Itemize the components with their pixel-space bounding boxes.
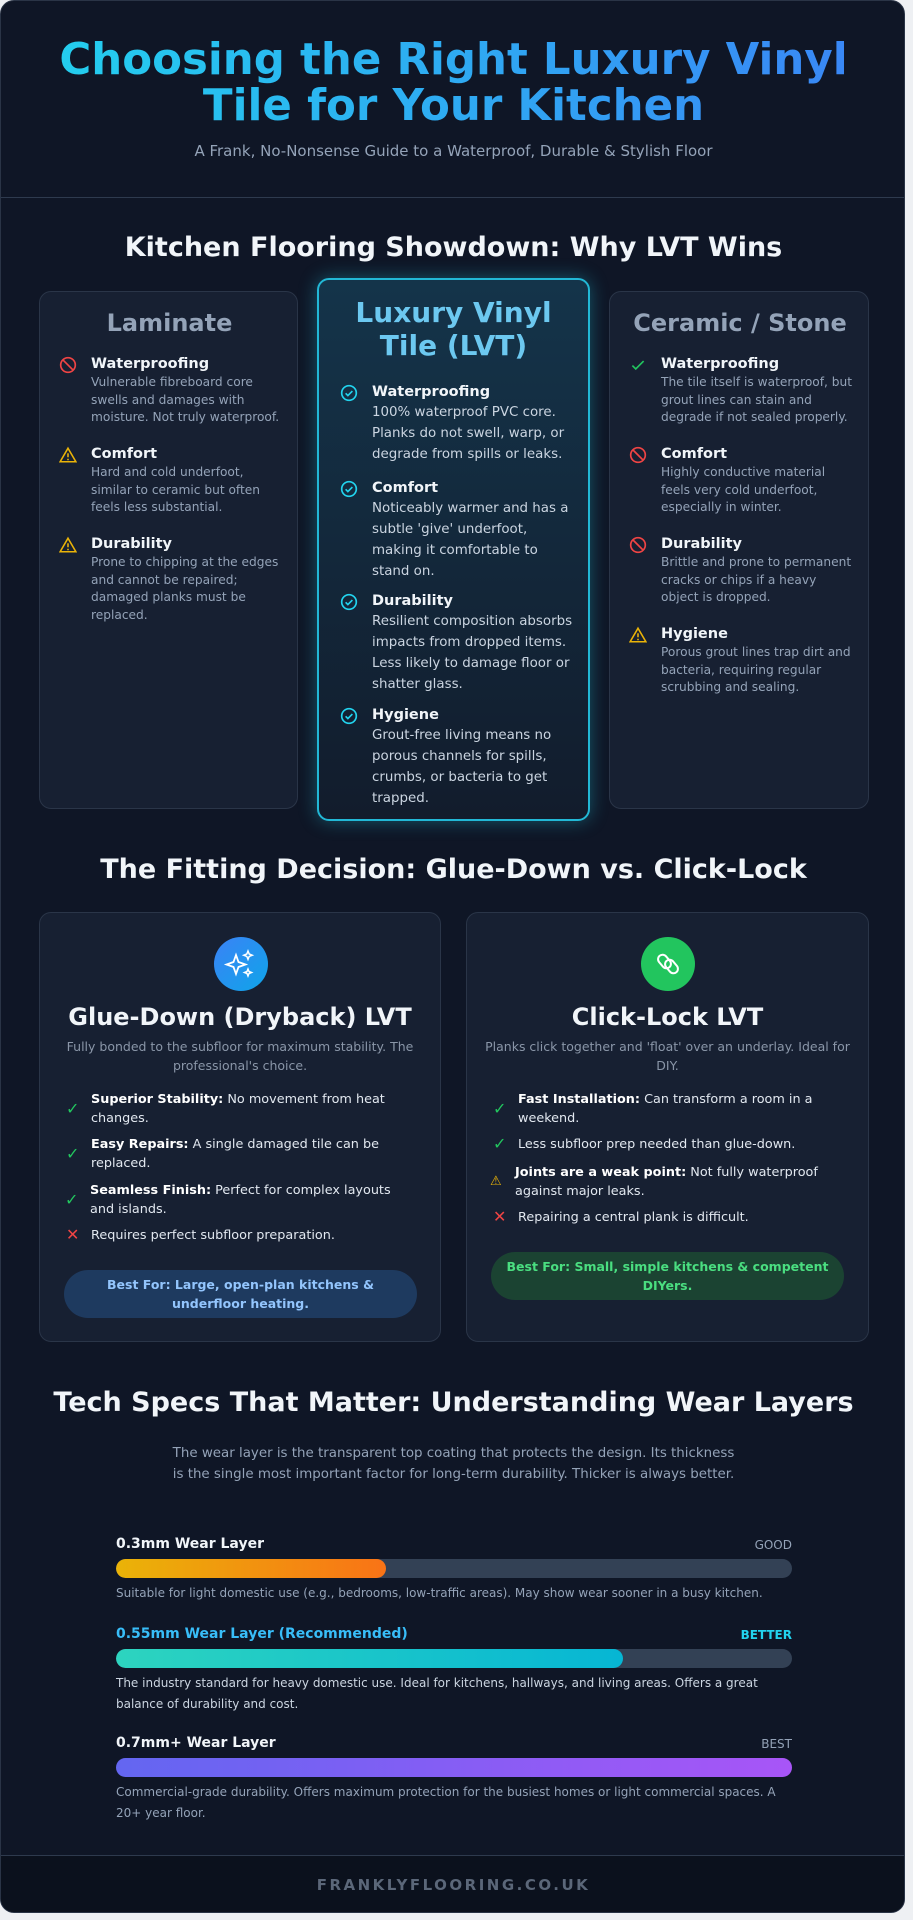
footer: FRANKLYFLOORING.CO.UK <box>317 1876 590 1894</box>
item: comfort: Comfort <box>91 446 157 462</box>
best for pill <box>64 1270 417 1318</box>
item: waterproofing: Waterproofing <box>372 384 490 400</box>
item: durability: Durability <box>661 536 742 552</box>
panel: LVT <box>317 278 590 821</box>
bar: 0.55mm <box>116 1626 792 1711</box>
intro text: The wear layer is the transparent top coating that protects the design. Its thickness <box>173 1446 734 1461</box>
click list: Less subfloor prep needed than glue-down. <box>518 1137 795 1152</box>
bar: 0.3mm: 0.3mm Wear Layer <box>116 1536 264 1552</box>
panel: glue-down <box>39 912 441 1342</box>
header <box>1 1 906 198</box>
heading: wear layers: Tech Specs That Matter: Understanding Wear Layers <box>53 1387 854 1418</box>
panel: click-lock: ⚠ <box>490 1174 502 1189</box>
item: durability: Durability <box>91 536 172 552</box>
item: comfort: Highly conductive material feels very cold underfoot, especially in winter. <box>661 465 825 514</box>
click list: Joints are a weak point: Not fully waterproof against major leaks. <box>515 1165 818 1199</box>
glue list <box>65 1092 391 1244</box>
bar: 0.7mm: 0.7mm+ Wear Layer <box>116 1735 276 1751</box>
bar: 0.7mm: Commercial-grade durability. Offers maximum protection for the busiest homes or light commercial spaces. A 20+ year floor. <box>116 1785 776 1820</box>
title: Choosing the Right Luxury Vinyl <box>59 35 848 85</box>
panel: ceramic <box>609 291 869 809</box>
LVT title <box>355 296 552 362</box>
item: comfort <box>59 446 260 514</box>
item: durability: Brittle and prone to permanent cracks or chips if a heavy object is dropped. <box>661 555 851 604</box>
item: hygiene: Grout-free living means no porous channels for spills, crumbs, or bacteria to get trapped. <box>372 728 551 806</box>
click list: Fast Installation: Can transform a room in a weekend. <box>518 1092 812 1126</box>
item: waterproofing <box>632 356 852 424</box>
item: comfort: Noticeably warmer and has a <box>372 501 568 516</box>
panel: click-lock <box>466 912 869 1342</box>
item: durability: Resilient composition absorbs impacts from dropped items. Less likely to damage floor or shatter glass. <box>372 614 572 692</box>
footer <box>1 1855 906 1915</box>
LVT title: Tile (LVT) <box>380 329 527 362</box>
item: hygiene <box>340 707 551 806</box>
item: comfort: Comfort <box>661 446 727 462</box>
item: comfort: Comfort <box>372 480 438 496</box>
bar: 0.55mm: The industry standard for heavy domestic use. Ideal for kitchens, hallways, and living areas. Offers a great balance of durability and cost. <box>116 1676 758 1711</box>
panel: click-lock: ✓ <box>493 1134 506 1153</box>
item: waterproofing: Vulnerable fibreboard core swells and damages with moisture. Not truly waterproof. <box>91 375 279 424</box>
panel: click-lock: ✓ <box>493 1099 506 1118</box>
bar: 0.7mm: BEST <box>761 1737 792 1751</box>
glue list: Seamless Finish: Perfect for complex layouts and islands. <box>90 1183 391 1217</box>
panel: laminate <box>39 291 298 809</box>
click desc: Planks click together and 'float' over an underlay. Ideal for DIY. <box>485 1039 850 1073</box>
item: waterproofing: 100% waterproof PVC core. Planks do not swell, warp, or degrade from spills or leaks. <box>372 405 564 462</box>
subtitle: A Frank, No-Nonsense Guide to a Waterproof, Durable & Stylish Floor <box>194 142 713 160</box>
item: comfort <box>630 446 825 514</box>
click title: Click-Lock LVT <box>572 1003 763 1031</box>
panel: glue-down: ✓ <box>66 1144 79 1163</box>
glue desc: Fully bonded to the subfloor for maximum stability. The professional's choice. <box>67 1039 413 1073</box>
glue list: Superior Stability: No movement from heat changes. <box>91 1092 385 1126</box>
bar: 0.7mm <box>116 1735 792 1820</box>
item: waterproofing <box>60 356 279 424</box>
glue title: Glue-Down (Dryback) LVT <box>68 1003 412 1031</box>
title <box>1 37 906 129</box>
item: comfort <box>340 480 568 579</box>
ceramic title: Ceramic / Stone <box>633 309 847 337</box>
item: durability: Prone to chipping at the edges and cannot be repaired; damaged planks must be replaced. <box>91 555 278 622</box>
item: durability <box>340 593 572 692</box>
click list: Repairing a central plank is difficult. <box>518 1210 749 1225</box>
panel: click-lock: ✕ <box>493 1207 506 1226</box>
best for pill: DIYers. <box>643 1278 692 1293</box>
item: waterproofing: The tile itself is waterproof, but grout lines can stain and degrade if not sealed properly. <box>661 375 852 424</box>
bar: 0.3mm <box>116 1536 792 1600</box>
intro text: is the single most important factor for long-term durability. Thicker is always better. <box>173 1467 734 1482</box>
item: durability <box>630 536 851 604</box>
click list <box>490 1092 818 1226</box>
item: hygiene <box>629 626 851 694</box>
best for pill: underfloor heating. <box>172 1296 309 1311</box>
item: waterproofing: Waterproofing <box>91 356 209 372</box>
item: hygiene: Hygiene <box>372 707 439 723</box>
panel: glue-down: ✓ <box>65 1190 78 1209</box>
heading: fitting: The Fitting Decision: Glue-Down vs. Click-Lock <box>100 854 807 885</box>
icon: sparkles <box>214 937 268 991</box>
intro text <box>172 1446 734 1482</box>
panel: glue-down: ✕ <box>66 1225 79 1244</box>
laminate title: Laminate <box>107 309 232 337</box>
item: waterproofing <box>340 384 564 462</box>
best for pill: Best For: Small, simple kitchens & competent <box>507 1259 828 1274</box>
glue list: Easy Repairs: A single damaged tile can be replaced. <box>91 1137 379 1171</box>
item: hygiene: Hygiene <box>661 626 728 642</box>
title: Tile for Your Kitchen <box>203 81 704 131</box>
item: waterproofing: Waterproofing <box>661 356 779 372</box>
item: comfort: subtle 'give' underfoot, making it comfortable to stand on. <box>372 522 538 579</box>
glue list: Requires perfect subfloor preparation. <box>91 1228 335 1243</box>
item: hygiene: Porous grout lines trap dirt and bacteria, requiring regular scrubbing and sealing. <box>661 645 851 694</box>
icon: link <box>641 937 695 991</box>
bar: 0.3mm: GOOD <box>755 1538 792 1552</box>
best for pill <box>491 1252 844 1300</box>
bar: 0.55mm: 0.55mm Wear Layer (Recommended) <box>116 1626 408 1642</box>
best for pill: Best For: Large, open-plan kitchens & <box>107 1277 374 1292</box>
item: durability: Durability <box>372 593 453 609</box>
item: comfort: Hard and cold underfoot, similar to ceramic but often feels less substantial. <box>91 465 260 514</box>
bar: 0.55mm: BETTER <box>741 1628 792 1642</box>
LVT title: Luxury Vinyl <box>355 296 552 329</box>
item: durability <box>59 536 278 622</box>
bar: 0.3mm: Suitable for light domestic use (e.g., bedrooms, low-traffic areas). May show wear sooner in a busy kitchen. <box>116 1586 763 1600</box>
panel: glue-down: ✓ <box>66 1099 79 1118</box>
heading: showdown: Kitchen Flooring Showdown: Why LVT Wins <box>125 232 782 263</box>
